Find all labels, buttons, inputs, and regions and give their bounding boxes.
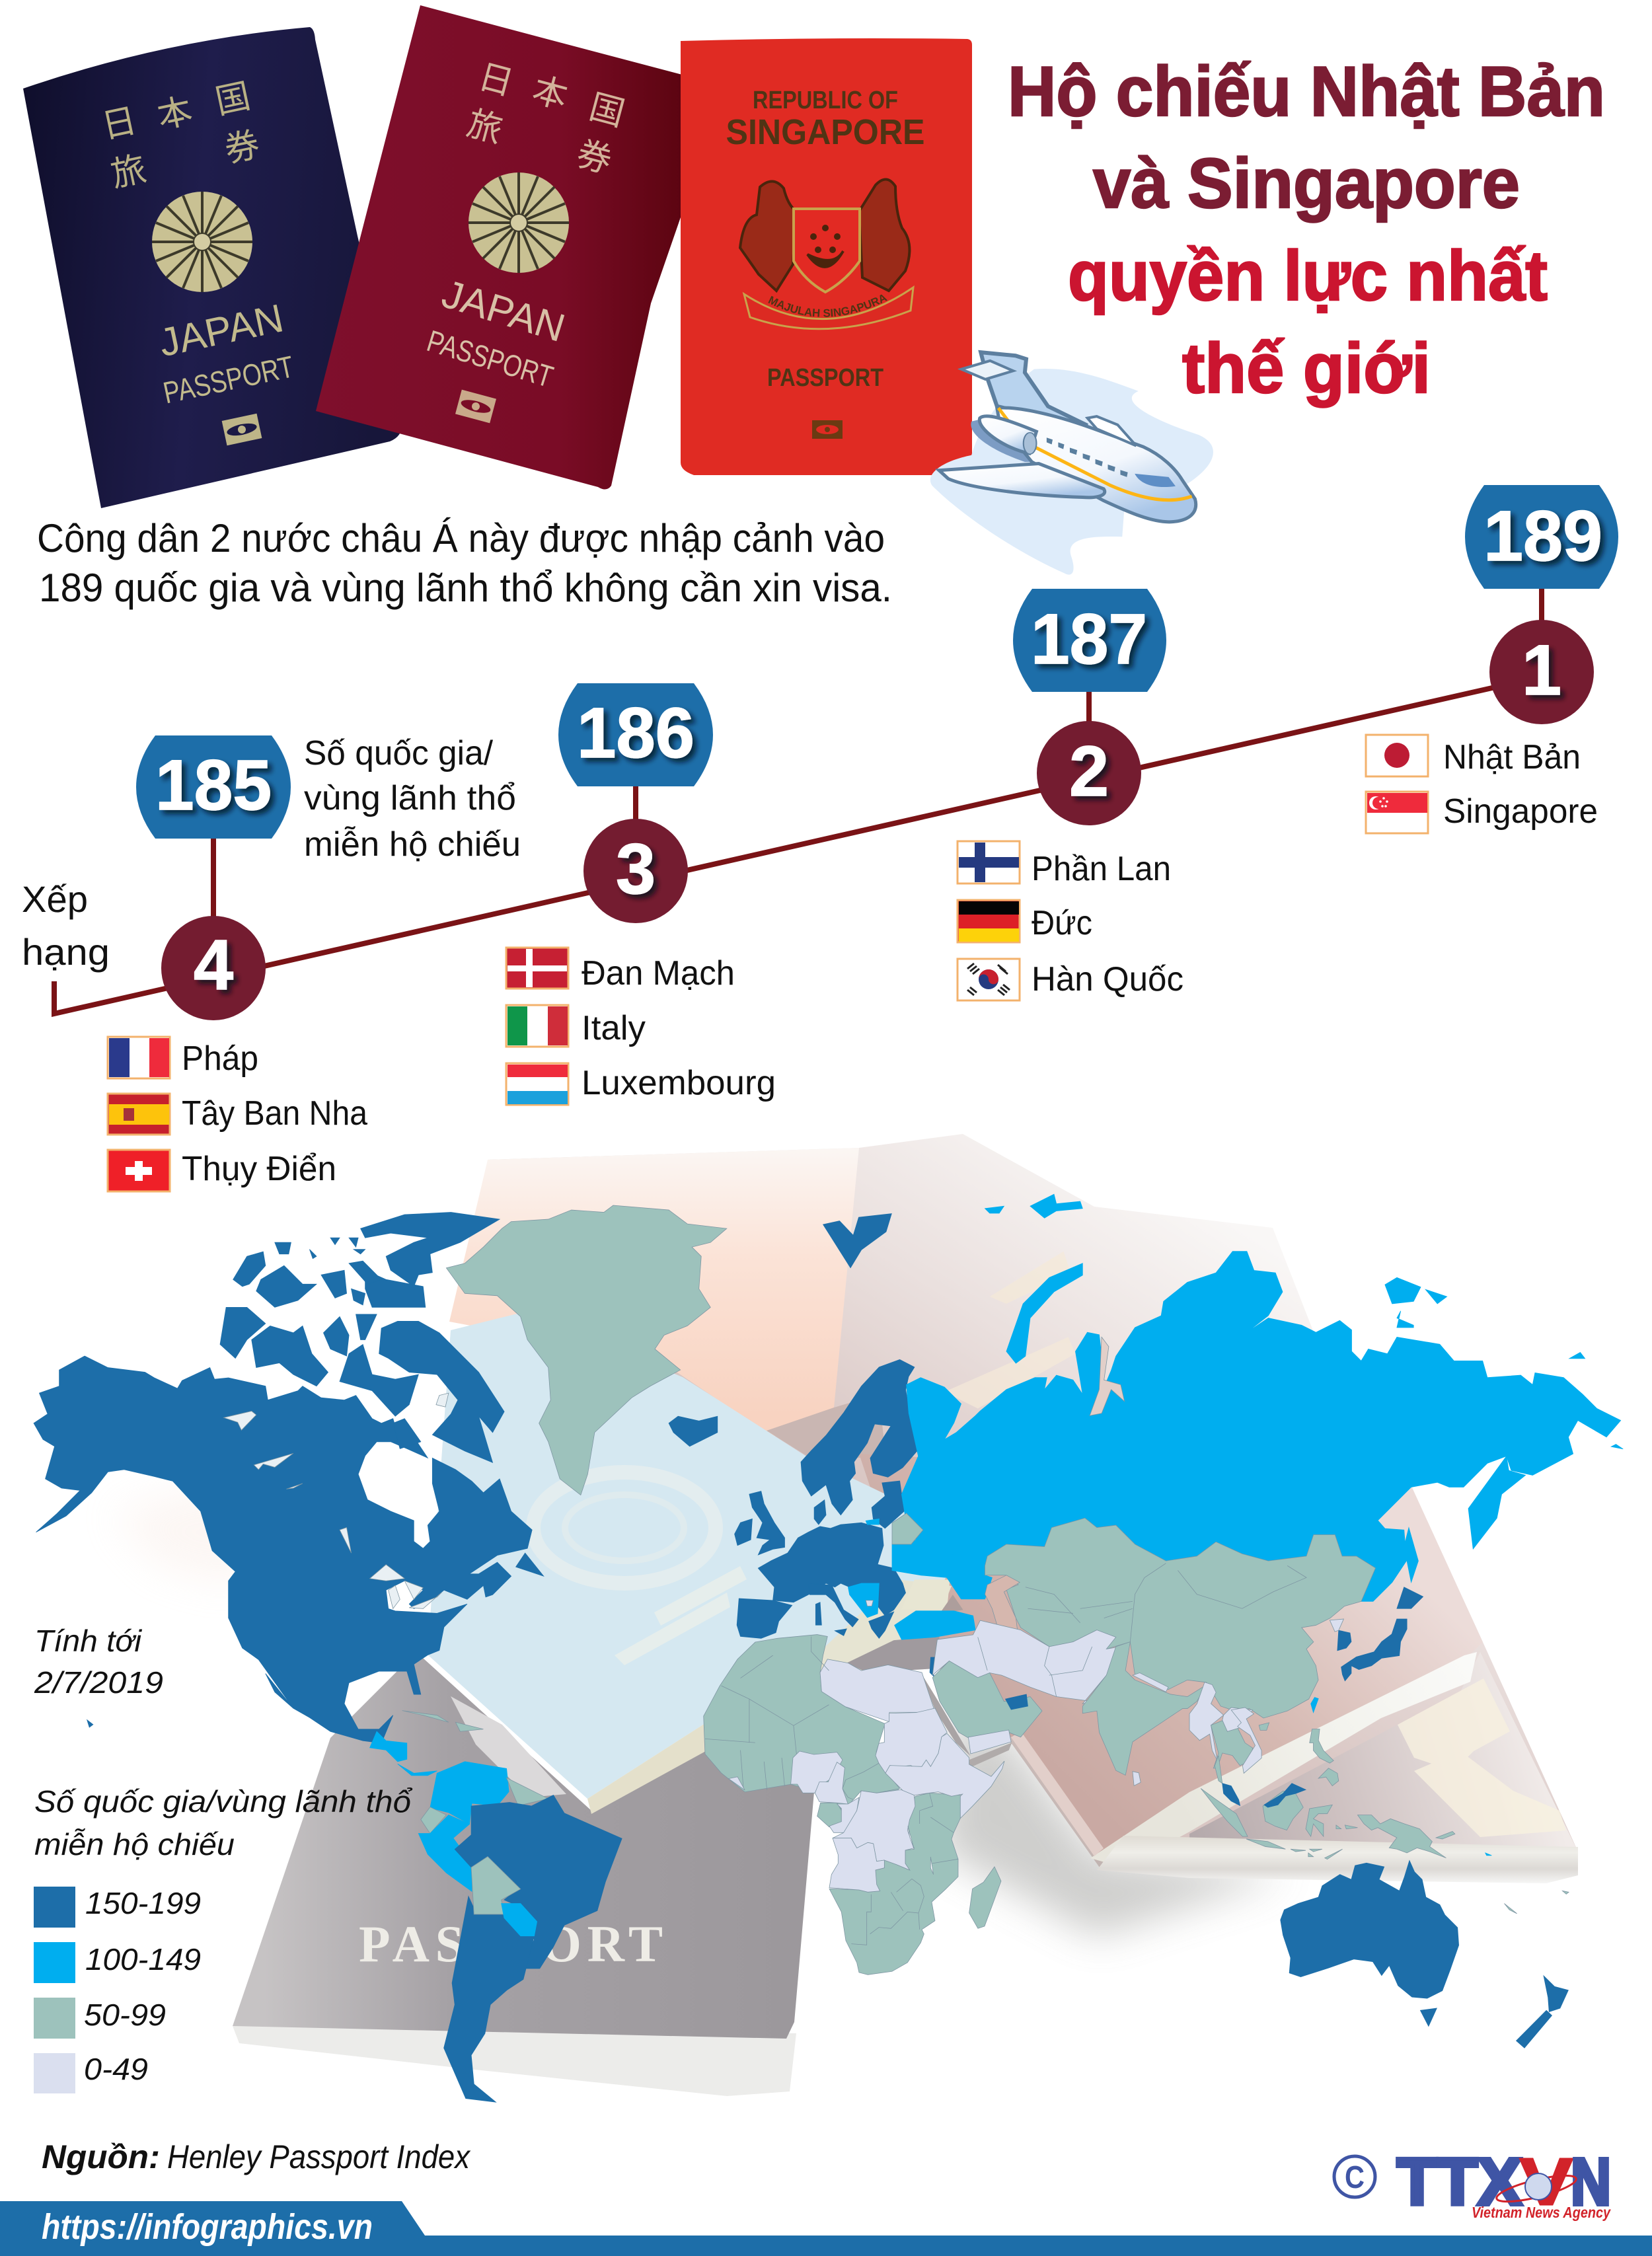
legend xyxy=(34,1784,413,2093)
rank 2 node: 2 xyxy=(1069,731,1109,811)
list: rank 1 countries: Singapore xyxy=(1443,792,1598,831)
legend title: Số quốc gia/vùng lãnh thổ xyxy=(34,1784,413,1819)
borders: Central Asia and Mongolia xyxy=(1026,1563,1306,1642)
rank 4 node xyxy=(136,735,291,1020)
region: North and West Africa xyxy=(704,1635,901,1811)
legend item: 0-49: 0-49 xyxy=(84,2052,148,2086)
map: Asia xyxy=(892,1194,1623,1786)
region: Ob gulf xyxy=(1090,1337,1125,1415)
region: Malaysia xyxy=(1215,1756,1306,1830)
map: South East Asia and Oceania xyxy=(1189,1619,1569,1998)
region: Indonesia and Philippines xyxy=(1201,1723,1569,1914)
rank 3 node xyxy=(558,683,713,923)
list: rank 4 countries: Pháp xyxy=(182,1039,258,1078)
icon: airplane xyxy=(930,352,1213,575)
map: South America xyxy=(444,1795,622,2102)
region: Gabon and Central African Republic xyxy=(817,1803,841,1827)
shadow under lower right passport xyxy=(938,1711,1289,1936)
note: date xyxy=(34,1624,163,1700)
faded passport: pink upper xyxy=(488,1134,1578,1877)
caption: number of visa-free destinations: miễn hộ chiếu xyxy=(304,825,521,864)
caption: number of visa-free destinations xyxy=(304,734,521,864)
list: rank 3 countries: Italy xyxy=(582,1009,646,1047)
list: rank 2 countries: Đức xyxy=(1032,904,1092,942)
passport: Japan maroon: PASSPORT xyxy=(423,323,557,394)
region: West Balkans xyxy=(848,1583,879,1618)
title: quyền lực nhất xyxy=(1068,236,1548,315)
legend item: 100-149: 100-149 xyxy=(85,1942,201,1976)
flag: South Korea xyxy=(957,959,1020,1000)
list: rank 1 countries xyxy=(1366,735,1598,833)
lakes xyxy=(224,1393,449,1608)
passport: Japan maroon: 本 xyxy=(528,61,574,118)
region: Caspian sea xyxy=(985,1575,1020,1637)
list: rank 4 countries xyxy=(108,1037,367,1191)
faded passport: dark gaps xyxy=(846,1579,1012,1767)
faded passport: mauve panel xyxy=(1189,1652,1578,1865)
flag: Finland xyxy=(957,841,1020,884)
list: rank 4 countries: Thụy Điển xyxy=(182,1150,336,1188)
title xyxy=(1008,52,1605,408)
logo: TTXVN: TTX xyxy=(1397,2145,1522,2219)
passport: Japan navy: 旅 xyxy=(106,141,150,196)
legend item: 50-99: 50-99 xyxy=(84,1998,166,2032)
region: South Asia west xyxy=(932,1620,1121,1704)
rank 2 node xyxy=(1013,589,1166,825)
region: Australia xyxy=(1281,1860,1459,1998)
region: Greenland xyxy=(446,1205,727,1495)
axis label: Xếp xyxy=(22,878,88,920)
legend item: 100-149 xyxy=(34,1942,201,1983)
legend item: 150-199: 150-199 xyxy=(85,1886,201,1920)
axis line xyxy=(54,677,1542,1014)
axis label xyxy=(22,878,110,973)
map: Svalbard, Tasmania, New Zealand xyxy=(823,1214,1568,2048)
icon: Singapore coat of arms xyxy=(739,178,915,330)
rank 4 node: 185 xyxy=(155,745,272,825)
logo: TTXVN: Vietnam News Agency xyxy=(1472,2204,1611,2221)
borders: Iran and Afghanistan xyxy=(978,1637,1092,1697)
list: rank 3 countries: Đan Mạch xyxy=(582,954,735,993)
rose edge band xyxy=(1011,1731,1104,1856)
region: Japan and Korea xyxy=(1330,1619,1407,1681)
passport: Japan navy: 本 xyxy=(152,83,196,138)
passport: Japan maroon xyxy=(316,5,687,490)
region: Guinea coast xyxy=(729,1777,745,1790)
panel: passport photos xyxy=(23,5,972,508)
region: Belarus xyxy=(892,1513,923,1544)
region: Arabia xyxy=(932,1661,1042,1742)
faded passport: light blue xyxy=(428,1312,978,1814)
flag: Switzerland xyxy=(108,1150,170,1191)
caption: number of visa-free destinations: vùng lãnh thổ xyxy=(304,779,516,817)
flag: Germany xyxy=(957,900,1020,942)
chart: ranking timeline xyxy=(22,485,1618,1191)
intro text: Công dân 2 nước châu Á này được nhập cảnh vào xyxy=(37,516,885,560)
logo: TTXVN: V xyxy=(1520,2145,1573,2219)
background: faded passports xyxy=(112,1134,1578,2096)
icon: copyright: C xyxy=(1345,2160,1365,2195)
passport: Japan navy: 券 xyxy=(219,116,264,172)
passport: Japan navy xyxy=(23,27,402,508)
region: Taiwan xyxy=(1311,1698,1318,1713)
passport: Japan navy: JAPAN xyxy=(155,295,287,365)
borders: West Africa xyxy=(705,1636,829,1790)
list: rank 2 countries: Hàn Quốc xyxy=(1032,960,1183,998)
passport: Japan maroon: 旅 xyxy=(463,95,509,152)
legend item: 0-49 xyxy=(34,2052,148,2093)
title: thế giới xyxy=(1182,328,1431,408)
passport: Japan maroon: JAPAN xyxy=(437,272,570,350)
logo: TTXVN xyxy=(1334,2145,1611,2221)
source xyxy=(42,2138,471,2175)
axis label: hạng xyxy=(22,931,110,973)
lakes xyxy=(908,1826,914,1849)
list: rank 4 countries: Tây Ban Nha xyxy=(182,1094,367,1133)
flag: France xyxy=(108,1037,170,1078)
legend item: 50-99 xyxy=(34,1998,166,2039)
region: Low-ranked African states xyxy=(791,1708,1004,1892)
world map xyxy=(34,1194,1623,2102)
title: và Singapore xyxy=(1093,143,1520,223)
page edges xyxy=(1097,1836,1578,1883)
borders: Southern Africa xyxy=(851,1793,958,1945)
legend item: 150-199 xyxy=(34,1886,201,1928)
region: Europe xyxy=(735,1359,935,1676)
rank 1 node xyxy=(1465,485,1618,724)
flag: Italy xyxy=(506,1005,568,1047)
soft blush near Alaska xyxy=(112,1480,284,1586)
region: Russia xyxy=(892,1194,1623,1639)
region: Hokkaido xyxy=(1397,1587,1423,1608)
footer bar: https://infographics.vn xyxy=(42,2207,373,2247)
passport: Singapore red: PASSPORT xyxy=(767,364,883,392)
faded passport: grey: PASSPORT xyxy=(359,1915,663,1973)
flag: Luxembourg xyxy=(506,1063,568,1105)
faded passport: grey xyxy=(233,1652,815,2096)
logo: TTXVN: N xyxy=(1571,2145,1611,2219)
flag: Spain xyxy=(108,1094,170,1135)
legend title: miễn hộ chiếu xyxy=(34,1827,235,1861)
rank 1 node: 1 xyxy=(1522,630,1561,710)
caption: number of visa-free destinations: Số quốc gia/ xyxy=(304,734,494,772)
region: Indochina xyxy=(1189,1682,1261,1773)
faded passport: rose lower xyxy=(859,1454,1483,1856)
title: Hộ chiếu Nhật Bản xyxy=(1008,52,1605,131)
source: Nguồn: xyxy=(42,2138,160,2175)
faded passport: peach xyxy=(449,1148,859,1437)
passport: Singapore red xyxy=(681,38,972,475)
region: Kazakhstan, Mongolia, China xyxy=(985,1518,1376,1718)
passport: Japan maroon: 券 xyxy=(572,126,619,182)
region: East and Southern Africa xyxy=(829,1793,960,1974)
rank 1 node: 189 xyxy=(1483,496,1602,576)
intro text: 189 quốc gia và vùng lãnh thổ không cần xin visa. xyxy=(39,566,892,610)
passport: Singapore red: SINGAPORE xyxy=(726,112,925,152)
passport: Japan maroon: 日 xyxy=(474,48,520,105)
map: North America and Greenland xyxy=(34,1205,727,1891)
list: rank 3 countries xyxy=(506,948,776,1105)
list: rank 2 countries: Phần Lan xyxy=(1032,850,1171,888)
cream patches xyxy=(1398,1678,1566,1837)
icon: Singapore coat of arms: MAJULAH SINGAPURA xyxy=(768,295,887,317)
region: Libya and Egypt xyxy=(820,1659,935,1722)
note: date: Tính tới xyxy=(34,1624,143,1658)
passport: Singapore red: REPUBLIC OF xyxy=(753,87,898,114)
icon: copyright xyxy=(1334,2156,1375,2197)
passport: Japan maroon: 国 xyxy=(585,79,631,135)
flag: Denmark xyxy=(506,948,568,989)
list: rank 2 countries xyxy=(957,841,1183,1000)
list: rank 3 countries: Luxembourg xyxy=(582,1064,776,1102)
region: Central America and north of South America xyxy=(370,1711,548,1891)
list: rank 1 countries: Nhật Bản xyxy=(1443,738,1581,776)
rank 3 node: 186 xyxy=(577,693,695,772)
spine highlight xyxy=(1090,1652,1477,1867)
map: Europe and Northern Africa xyxy=(704,1359,935,1811)
map: Central and Southern Africa xyxy=(791,1708,1004,1974)
legend title xyxy=(34,1784,413,1861)
intro text xyxy=(37,516,892,610)
note: date: 2/7/2019 xyxy=(34,1665,163,1700)
region: Canada, USA, Mexico xyxy=(34,1213,718,1743)
cream text block on upper passport xyxy=(944,1252,1075,1409)
rank 3 node: 3 xyxy=(616,829,656,909)
region: India xyxy=(1082,1642,1207,1775)
rank 2 node: 187 xyxy=(1031,599,1147,679)
flag: Singapore xyxy=(1366,792,1428,833)
region: Sri Lanka xyxy=(1133,1772,1141,1786)
flag: Japan xyxy=(1366,735,1428,776)
passport: Japan navy: PASSPORT xyxy=(160,349,297,410)
region: Nepal xyxy=(1133,1673,1168,1692)
icon: globe xyxy=(1495,2170,1578,2207)
source: Henley Passport Index xyxy=(167,2138,471,2175)
rank 4 node: 4 xyxy=(194,924,233,1004)
passport: Japan navy: 国 xyxy=(210,68,254,124)
passport: Japan navy: 日 xyxy=(96,93,141,148)
footer bar xyxy=(0,2201,1652,2256)
